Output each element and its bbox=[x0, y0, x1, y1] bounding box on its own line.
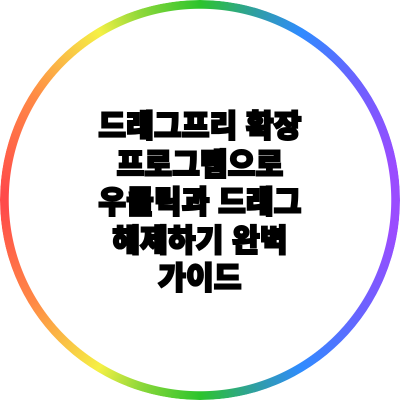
title: 우클릭과 드래그 bbox=[98, 186, 302, 220]
title: 해제하기 완벽 bbox=[112, 224, 288, 258]
title bbox=[98, 109, 302, 296]
title: 프로그램으로 bbox=[117, 148, 283, 182]
title: 드래그프리 확장 bbox=[98, 110, 302, 144]
title: 가이드 bbox=[158, 262, 242, 296]
